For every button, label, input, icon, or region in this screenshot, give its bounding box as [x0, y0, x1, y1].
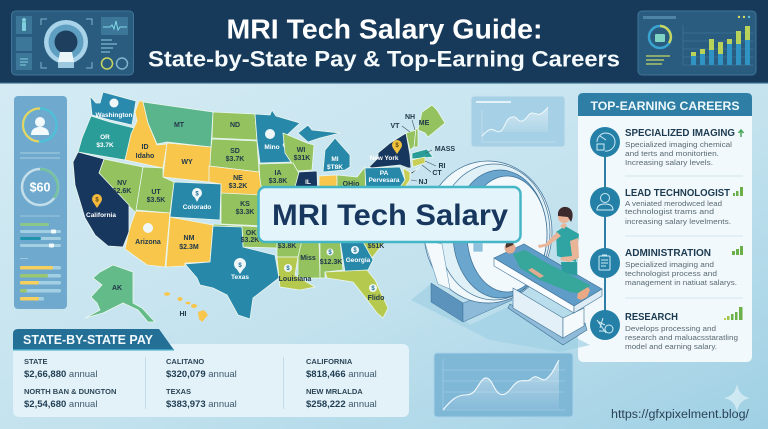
state labels: VT [391, 123, 400, 130]
career: administration: technologist process and [625, 269, 717, 278]
salary gauge: $60 [30, 180, 50, 194]
state labels: Arizona [135, 239, 161, 246]
icon: sparkle [724, 384, 750, 412]
state labels: $3.2K [241, 237, 259, 244]
column 3: CALIFORNIA [306, 357, 353, 366]
state labels: WI [297, 147, 305, 154]
state fills [73, 92, 445, 319]
icon: map pins: $ [328, 250, 332, 256]
state labels: OK [246, 230, 256, 237]
career: research [590, 307, 742, 351]
column 2 [166, 357, 237, 410]
career: lead technologist: A veniated merodwced lead [625, 199, 722, 208]
panel: state-by-state pay [13, 329, 409, 417]
state labels: $3.7K [96, 142, 114, 149]
progress bars [20, 223, 61, 300]
state labels: Mino [264, 144, 280, 151]
state labels: NE [233, 175, 243, 182]
title: MRI Tech Salary Guide: [226, 14, 542, 44]
state labels: $3.3K [236, 209, 254, 216]
column 1: $2,66,880 annual [24, 369, 97, 380]
column 3 [306, 357, 377, 410]
state labels: Georgia [346, 257, 371, 264]
state labels: NJ [419, 179, 428, 186]
US salary map [73, 92, 455, 322]
column 2: $383,973 annual [166, 399, 237, 410]
state labels: Colorado [183, 204, 211, 211]
Alaska [85, 265, 155, 322]
state labels: New York [369, 155, 399, 162]
state labels: $3.5K [147, 197, 165, 204]
center title card: MRI Tech Salary [272, 199, 508, 232]
icon: map pins: $ [286, 266, 290, 272]
state labels: MASS [435, 146, 455, 153]
column 3: $258,222 annual [306, 399, 377, 410]
Hawaii [164, 292, 208, 322]
panel: top-earning careers [578, 93, 752, 362]
state labels: $12.3K [320, 259, 342, 266]
career: lead technologist: technologist trams and [625, 207, 714, 216]
title [148, 14, 620, 72]
state labels: $T8K [327, 164, 343, 171]
career: lead technologist [590, 187, 743, 226]
state labels: Washington [96, 112, 132, 119]
title: State-by-State Pay & Top-Earning Careers [148, 46, 620, 72]
section tab heading [13, 329, 174, 350]
icon: doctor ring [23, 108, 57, 142]
state labels: $51K [368, 243, 384, 250]
icon: map pins: $ [371, 286, 375, 292]
career: administration: management in natiuat salarys. [625, 278, 737, 287]
patient [504, 241, 590, 300]
column 1 [24, 357, 116, 410]
state labels: IL [305, 179, 311, 186]
state labels: $3.8K [269, 178, 287, 185]
state labels: Pervesara [368, 177, 400, 184]
state labels: Louisiana [279, 276, 311, 283]
state labels: $3.7K [226, 156, 244, 163]
state labels: ID [142, 144, 148, 151]
header widget: MRI scanner dashboard [12, 11, 134, 75]
illustration: MRI scanner and patient [411, 161, 602, 352]
column 1: NORTH BAN & DUNGTON [24, 387, 116, 396]
salary gauge [22, 169, 58, 205]
career: research: Develops processing and [625, 324, 716, 333]
career: administration: Specialized imaging and [625, 260, 714, 269]
career: research: model and earning salary. [625, 342, 717, 351]
chart: bottom trend line [434, 353, 573, 417]
column 1: STATE [24, 357, 47, 366]
icon: map pins: $ [238, 263, 242, 269]
icon: map pins: $ [353, 248, 357, 254]
career: specialized imaging [590, 127, 744, 167]
state labels: $2.6K [113, 188, 131, 195]
state labels: Miss [300, 255, 316, 262]
state labels: NH [405, 114, 415, 121]
state labels: $2.3M [179, 244, 199, 251]
state labels: SD [230, 148, 240, 155]
state labels: ME [419, 120, 430, 127]
left stats panel [14, 96, 67, 309]
state labels: Idaho [136, 153, 154, 160]
career: lead technologist: increasing salary levelments. [625, 217, 731, 226]
exam table [494, 244, 602, 345]
panel heading: TOP-EARNING CAREERS [590, 99, 740, 113]
state labels: $3.8K [278, 243, 296, 250]
career: lead technologist: LEAD TECHNOLOGIST [625, 188, 730, 199]
state labels: Texas [231, 274, 249, 281]
state labels: IA [274, 170, 282, 177]
state labels: California [86, 212, 116, 219]
section tab heading: STATE-BY-STATE PAY [23, 333, 154, 347]
state labels: MI [331, 156, 339, 163]
career: research: research and maluacsstaratling [625, 333, 738, 342]
column 2: CALITANO [166, 357, 204, 366]
nurse [538, 207, 579, 276]
chart: top trend line [471, 96, 565, 147]
state labels: RI [438, 163, 446, 170]
career: specialized imaging: SPECIALIZED IMAGING [625, 128, 735, 139]
state labels: WY [181, 159, 193, 166]
state labels: MT [174, 122, 185, 129]
center title card [258, 187, 520, 242]
icon: microscope [590, 310, 620, 340]
state labels: NM [184, 235, 195, 242]
career: administration: ADMINISTRATION [625, 248, 711, 259]
state labels: KS [240, 201, 250, 208]
state labels: Flido [368, 295, 384, 302]
state labels: HI [180, 311, 187, 318]
icon: clipboard [590, 248, 620, 278]
scanner base [431, 283, 512, 322]
state labels: ND [230, 122, 240, 129]
career: research: RESEARCH [625, 312, 678, 323]
icon: map pins: $ [95, 198, 99, 204]
state labels: UT [151, 189, 161, 196]
header band [0, 0, 768, 84]
state labels: $31K [294, 155, 310, 162]
career: specialized imaging: and terts and monitortien. [625, 149, 719, 158]
icon: map pins: $ [195, 192, 199, 198]
state labels: PA [380, 170, 389, 177]
state labels: CT [432, 170, 442, 177]
icon: imaging [590, 127, 620, 157]
state labels: AK [112, 285, 122, 292]
column 3: $818,466 annual [306, 369, 377, 380]
state labels [86, 112, 455, 318]
column 2: TEXAS [166, 387, 191, 396]
icon: map pins: $ [395, 143, 399, 149]
floor shadow [411, 283, 590, 352]
career: specialized imaging: Specialized imaging chemical [625, 140, 732, 149]
state labels: OR [100, 134, 110, 141]
career: specialized imaging: Increasing salary levels. [625, 158, 713, 167]
column 2: $320,079 annual [166, 369, 237, 380]
panel heading [578, 93, 752, 116]
icon: technologist [590, 187, 620, 217]
column 1: $2,54,680 annual [24, 399, 97, 410]
state labels: OHio [343, 181, 359, 188]
career: administration [590, 246, 743, 287]
scanner body [424, 161, 552, 303]
column 3: NEW MRLALDA [306, 387, 363, 396]
state labels: $3.2K [229, 183, 247, 190]
header widget: salary bar chart [638, 11, 756, 75]
state labels: NV [117, 180, 127, 187]
icon: map pins [92, 98, 402, 292]
source url: https://gfxpixelment.blog/ [611, 409, 750, 421]
